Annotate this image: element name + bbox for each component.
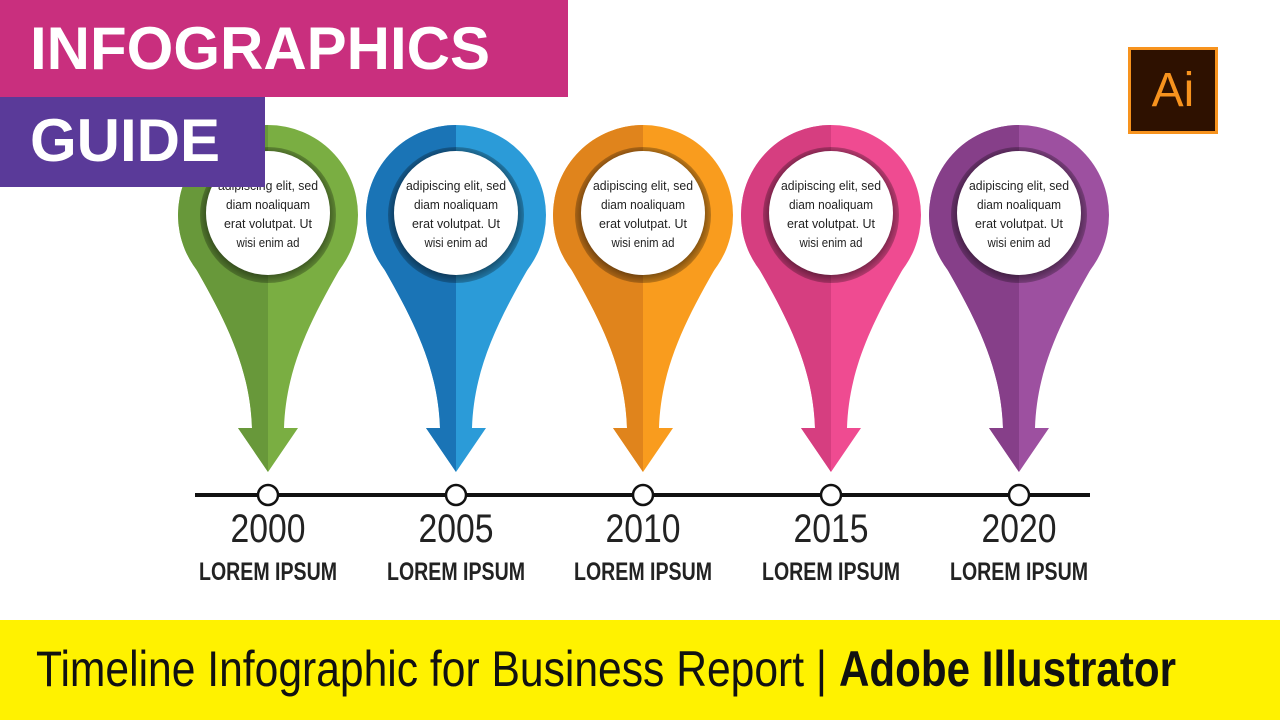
icon: Adobe Illustrator logo [1128, 47, 1218, 134]
title banner: GUIDE: GUIDE [30, 107, 220, 174]
pin texts: diam noaliquam [414, 197, 498, 212]
pin texts [218, 178, 1069, 250]
years [230, 507, 1056, 551]
years: 2005 [418, 507, 494, 551]
pin texts: adipiscing elit, sed [218, 178, 318, 193]
labels: LOREM IPSUM [574, 558, 712, 586]
title banner: GUIDE [0, 97, 265, 187]
pin texts: adipiscing elit, sed [406, 178, 506, 193]
pin texts: adipiscing elit, sed [593, 178, 693, 193]
years: 2010 [606, 507, 680, 551]
pin texts: wisi enim ad [424, 235, 488, 250]
footer text: Adobe Illustrator [839, 641, 1176, 697]
pin texts: diam noaliquam [789, 197, 873, 212]
pin texts: adipiscing elit, sed [781, 178, 881, 193]
icon: Adobe Illustrator logo: Ai [1152, 64, 1194, 117]
pin texts: diam noaliquam [601, 197, 685, 212]
pin texts: erat volutpat. Ut [787, 216, 875, 231]
labels: LOREM IPSUM [762, 558, 900, 586]
pin 2005 blue [366, 125, 546, 472]
labels: LOREM IPSUM [950, 558, 1088, 586]
pin 2015 pink [741, 125, 921, 472]
labels [199, 558, 1088, 586]
footer bar [0, 620, 1280, 720]
pin texts: diam noaliquam [977, 197, 1061, 212]
pin texts: diam noaliquam [226, 197, 310, 212]
pin 2000 green [178, 125, 358, 472]
pin texts: erat volutpat. Ut [975, 216, 1063, 231]
title banner: INFOGRAPHICS [0, 0, 568, 97]
pin texts: erat volutpat. Ut [224, 216, 312, 231]
timeline graphic [178, 125, 1109, 580]
timeline line [195, 485, 1090, 505]
pin 2020 purple [929, 125, 1109, 472]
pin texts: erat volutpat. Ut [599, 216, 687, 231]
labels: LOREM IPSUM [387, 558, 525, 586]
pin texts: wisi enim ad [799, 235, 862, 250]
title banner: INFOGRAPHICS: INFOGRAPHICS [30, 15, 490, 82]
pin texts: adipiscing elit, sed [969, 178, 1069, 193]
years: 2020 [982, 507, 1056, 551]
labels: LOREM IPSUM [199, 558, 337, 586]
pin texts: wisi enim ad [987, 235, 1050, 250]
pin texts: erat volutpat. Ut [412, 216, 500, 231]
pin texts: wisi enim ad [611, 235, 674, 250]
years: 2000 [230, 507, 306, 551]
pin texts: wisi enim ad [236, 235, 300, 250]
footer text: Timeline Infographic for Business Report | [36, 641, 827, 697]
years: 2015 [794, 507, 868, 551]
pin 2010 orange [553, 125, 733, 472]
